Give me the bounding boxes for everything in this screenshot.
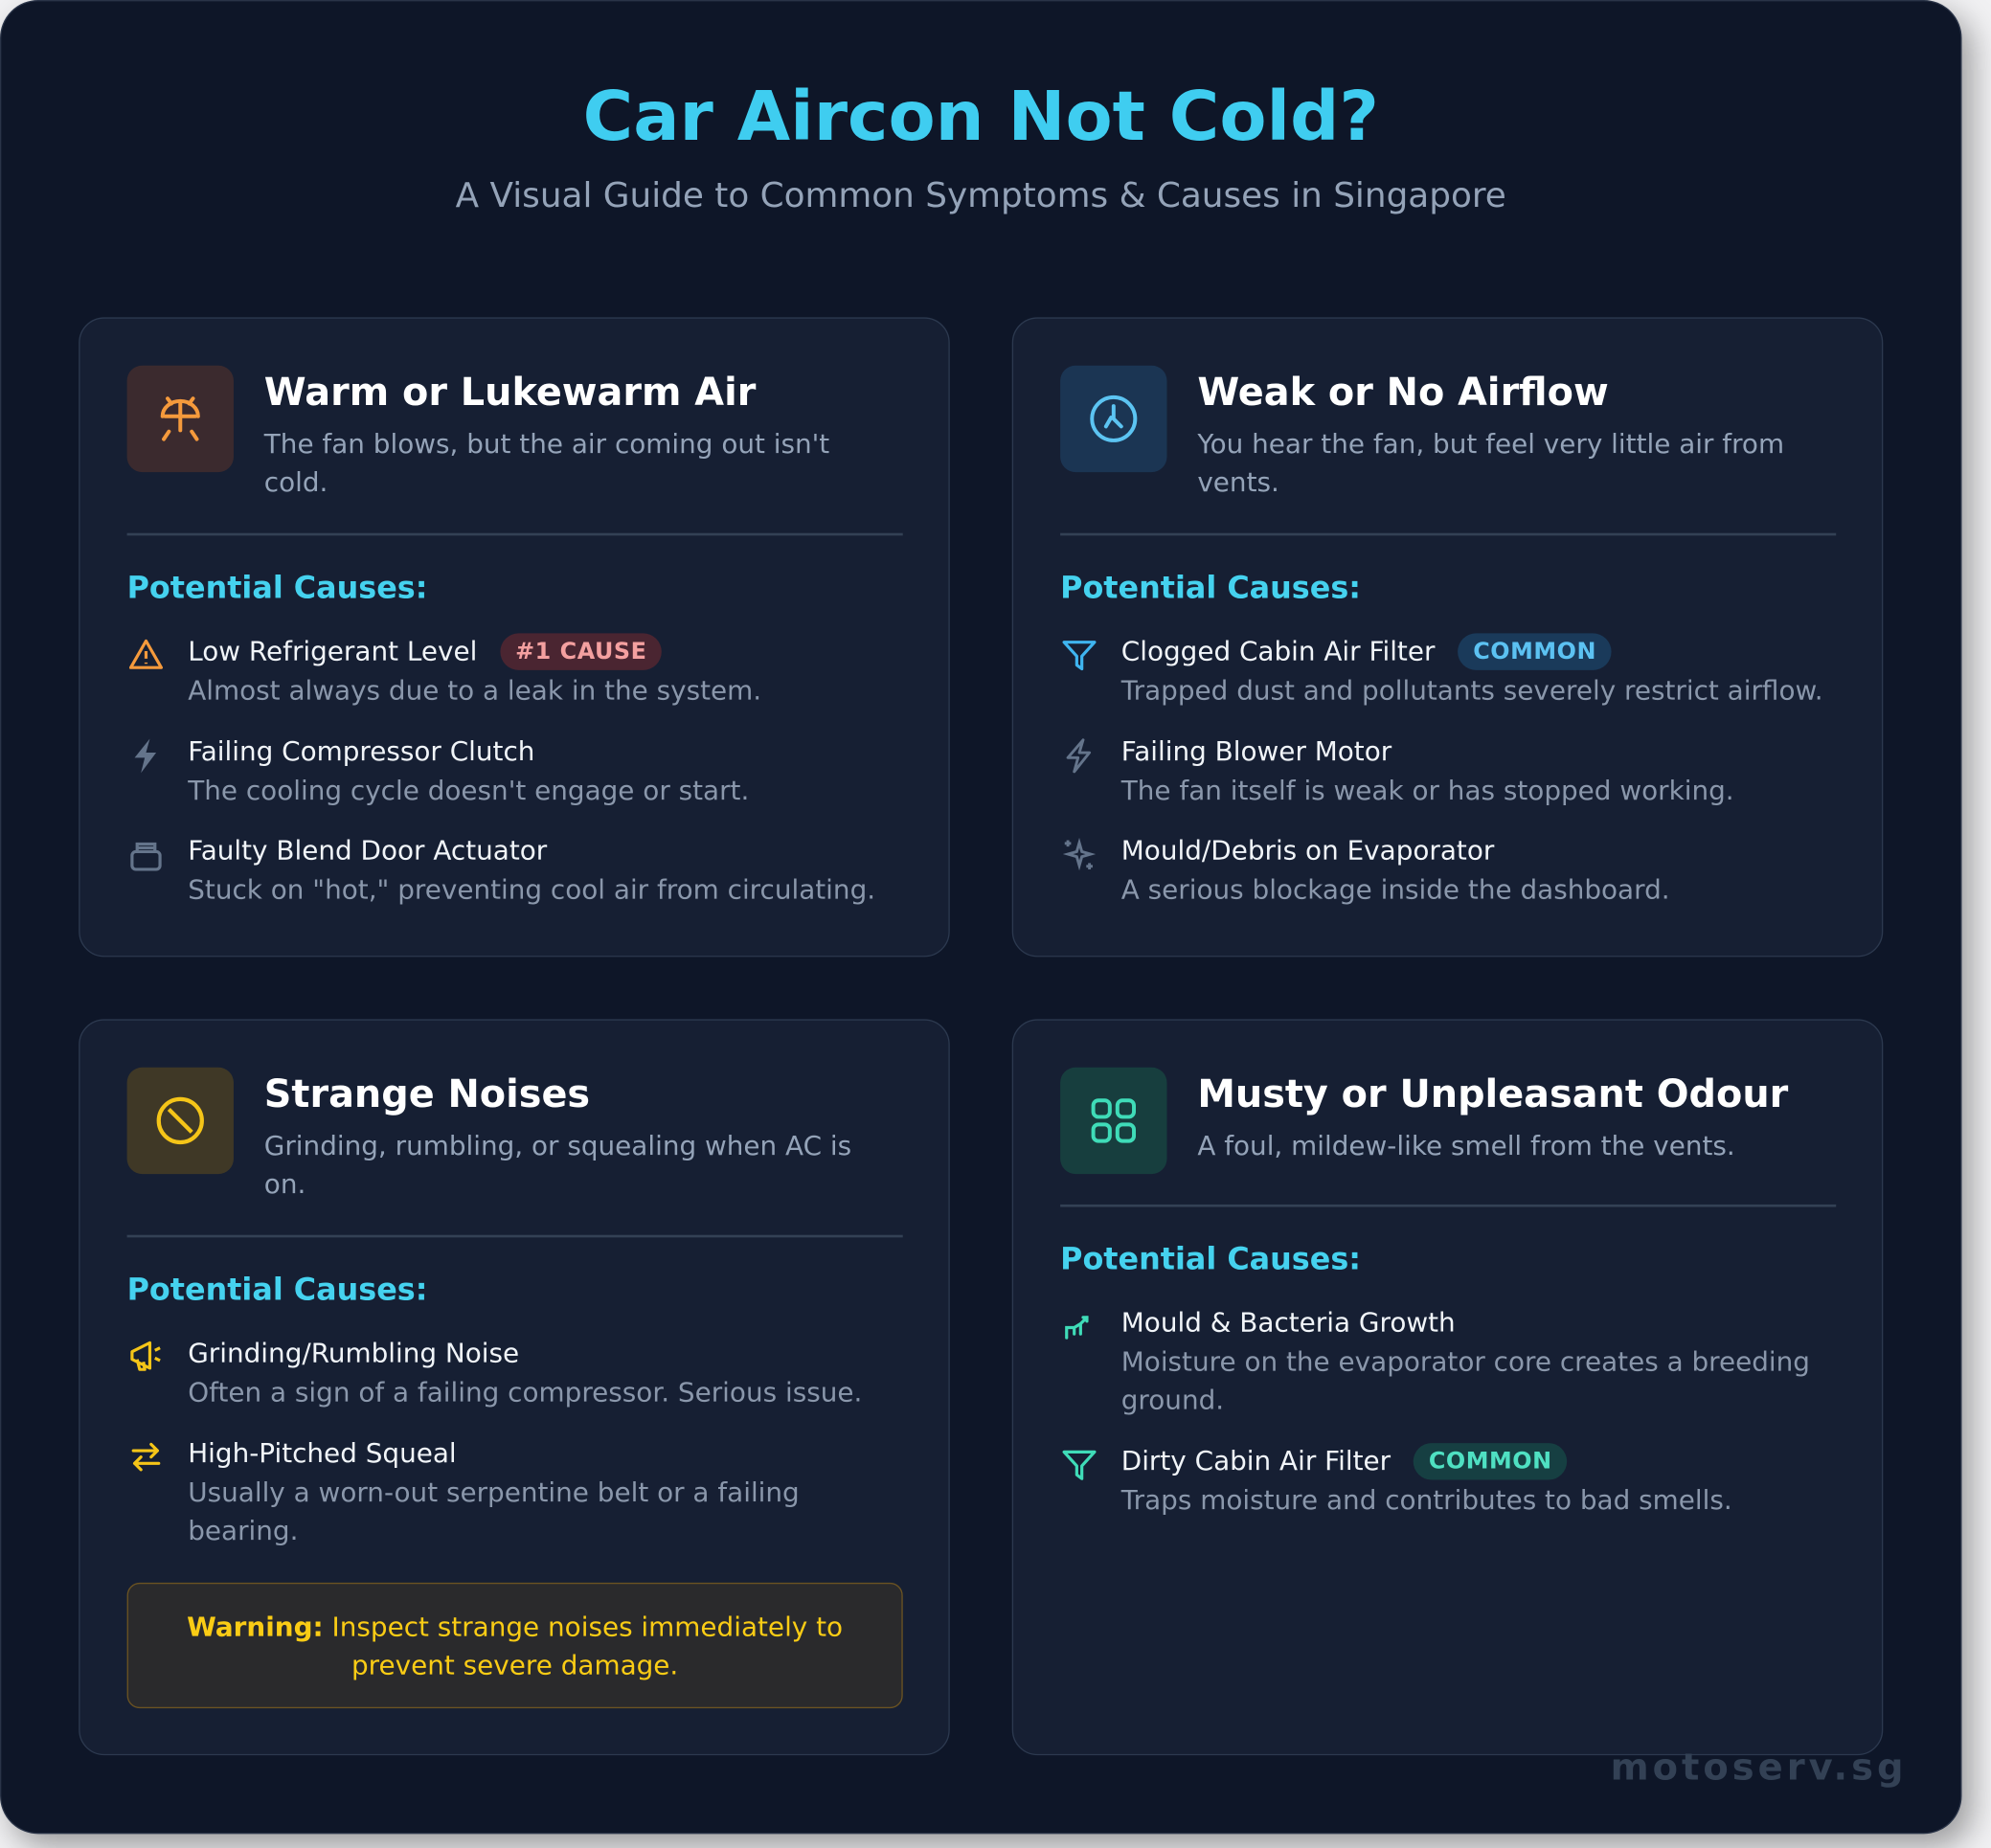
panel: weak airflow: Mould/Debris on Evaporator [1121, 835, 1494, 866]
panel: odour: Moisture on the evaporator core creates a breeding ground. [1121, 1346, 1810, 1415]
panel: odour: COMMON [1429, 1448, 1552, 1475]
panel: warm air: Stuck on "hot," preventing cool air from circulating. [188, 874, 875, 905]
panel: weak airflow [1012, 317, 1883, 957]
subtitle: A Visual Guide to Common Symptoms & Causes in Singapore [456, 176, 1506, 215]
causes heading: Potential Causes: [1060, 570, 1361, 605]
panel: warm air: Almost always due to a leak in the system. [188, 675, 761, 706]
title: Car Aircon Not Cold? [583, 77, 1379, 156]
panel: warm air: The cooling cycle doesn't engage or start. [188, 776, 749, 806]
panel: warm air: Faulty Blend Door Actuator [188, 835, 547, 866]
warning callout: Warning: Inspect strange noises immediately to prevent severe damage. [187, 1611, 843, 1679]
description: A foul, mildew-like smell from the vents. [1197, 1131, 1735, 1161]
warning callout [127, 1583, 903, 1708]
cause 3 [130, 835, 875, 905]
cause 1 [1062, 633, 1823, 706]
panel: odour: Traps moisture and contributes to bad smells. [1121, 1485, 1732, 1516]
icon: no sign [127, 1068, 234, 1174]
watermark: motoserv.sg [1611, 1746, 1907, 1789]
panel: strange noises: High-Pitched Squeal [188, 1438, 457, 1469]
panel: odour [1012, 1019, 1883, 1755]
icon: grid [1060, 1068, 1166, 1174]
panel: odour: Dirty Cabin Air Filter [1121, 1446, 1391, 1476]
cause 2 [1067, 736, 1734, 806]
panel: weak airflow: Clogged Cabin Air Filter [1121, 636, 1435, 666]
panel: weak airflow: A serious blockage inside the dashboard. [1121, 874, 1670, 905]
panel: weak airflow: COMMON [1473, 639, 1596, 665]
heading: Strange Noises [264, 1072, 590, 1116]
icon: gauge [1060, 366, 1166, 472]
heading: Musty or Unpleasant Odour [1197, 1072, 1788, 1116]
panel: warm air [79, 317, 950, 957]
cause 3 [1063, 835, 1670, 905]
description: The fan blows, but the air coming out isn't cold. [264, 429, 829, 498]
cause 2 [134, 736, 749, 806]
panel: warm air: #1 CAUSE [515, 639, 646, 665]
heading: Weak or No Airflow [1197, 371, 1609, 415]
causes heading: Potential Causes: [127, 570, 427, 605]
cause 1 [1065, 1307, 1810, 1415]
panel: strange noises: Grinding/Rumbling Noise [188, 1338, 519, 1368]
cause 2 [1062, 1443, 1732, 1516]
panel: strange noises [79, 1019, 950, 1755]
panel: weak airflow: Trapped dust and pollutants severely restrict airflow. [1121, 675, 1823, 706]
panel: weak airflow: Failing Blower Motor [1121, 736, 1391, 767]
causes heading: Potential Causes: [1060, 1241, 1361, 1276]
cause 1 [129, 633, 761, 706]
panel: strange noises: Often a sign of a failing compressor. Serious issue. [188, 1377, 862, 1408]
cause 2 [132, 1438, 800, 1545]
icon: sun/heat [127, 366, 234, 472]
panel: warm air: Failing Compressor Clutch [188, 736, 534, 767]
causes heading: Potential Causes: [127, 1272, 427, 1307]
description: You hear the fan, but feel very little air from vents. [1197, 429, 1784, 498]
cause 1 [130, 1338, 862, 1408]
panel: warm air: Low Refrigerant Level [188, 636, 477, 666]
panel: weak airflow: The fan itself is weak or has stopped working. [1121, 776, 1734, 806]
description: Grinding, rumbling, or squealing when AC is on. [264, 1131, 851, 1200]
heading: Warm or Lukewarm Air [264, 371, 756, 415]
panel: odour: Mould & Bacteria Growth [1121, 1307, 1456, 1338]
panel: strange noises: Usually a worn-out serpentine belt or a failing bearing. [188, 1477, 800, 1545]
